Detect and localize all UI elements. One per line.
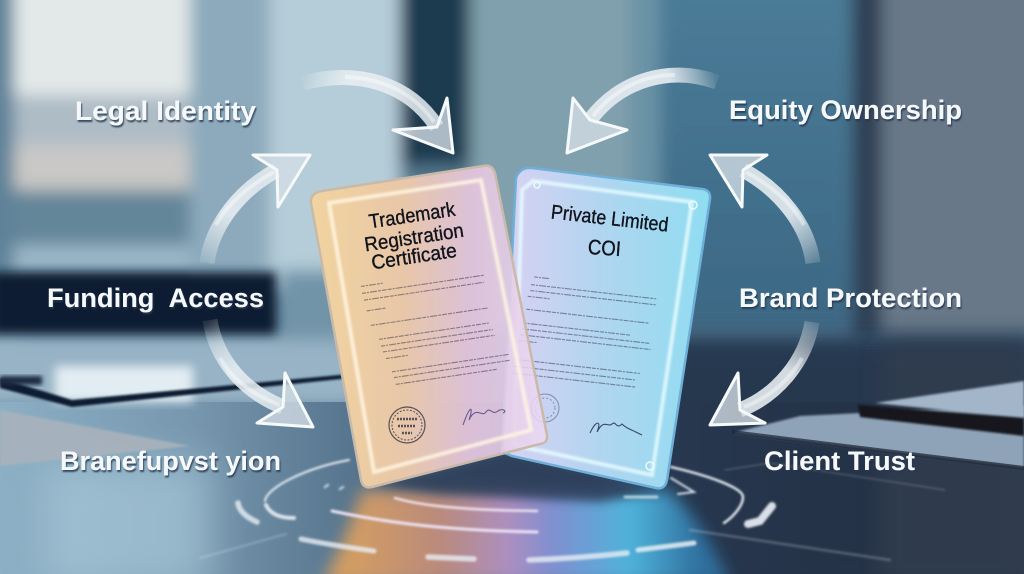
- heading: certificate title: [363, 199, 465, 274]
- panel: Trademark Registration Certificate: [311, 166, 547, 487]
- arrow: top right into COI certificate: [567, 75, 717, 153]
- icon: round seal: [389, 407, 425, 443]
- heading: certificate title: Trademark: [367, 199, 458, 233]
- arrow: right side going down: [710, 322, 812, 425]
- holographic rings on the table: [200, 460, 945, 560]
- label: Legal Identity: Legal Identity: [75, 96, 256, 126]
- heading: certificate title: Certificate: [370, 240, 458, 274]
- icon: signature: [463, 409, 505, 425]
- icon: signature: [590, 423, 642, 435]
- heading: certificate title: COI: [587, 236, 622, 261]
- heading: certificate title: Private Limited: [550, 201, 670, 237]
- panel: Private Limited COI certificate: [502, 168, 710, 488]
- text block: certificate body: [513, 276, 657, 388]
- icon: faint seal: [531, 394, 559, 422]
- notebook and pen on the right of the desk: [732, 381, 1024, 470]
- label: Branefupvst yion: Branefupvst yion: [60, 446, 281, 476]
- label: Client Trust: Client Trust: [764, 446, 915, 476]
- heading: certificate title: Registration: [363, 220, 465, 256]
- heading: certificate title: [550, 201, 670, 261]
- label: Equity Ownership: Equity Ownership: [729, 95, 962, 125]
- arrow: right side going up: [710, 155, 813, 263]
- holographic reflection on the table: [322, 490, 730, 574]
- label: Funding Access: Funding Access: [47, 283, 264, 313]
- laptop on the left table: [0, 366, 350, 407]
- text block: certificate body: [361, 266, 511, 387]
- label: Brand Protection: Brand Protection: [739, 283, 962, 313]
- arrow: left side going up: [207, 155, 310, 263]
- sheet of paper on the left of the desk: [0, 410, 190, 466]
- shadow under the certificates: [372, 452, 660, 502]
- arrow: top left into trademark certificate: [303, 77, 453, 153]
- arrow: left side going down: [210, 320, 313, 427]
